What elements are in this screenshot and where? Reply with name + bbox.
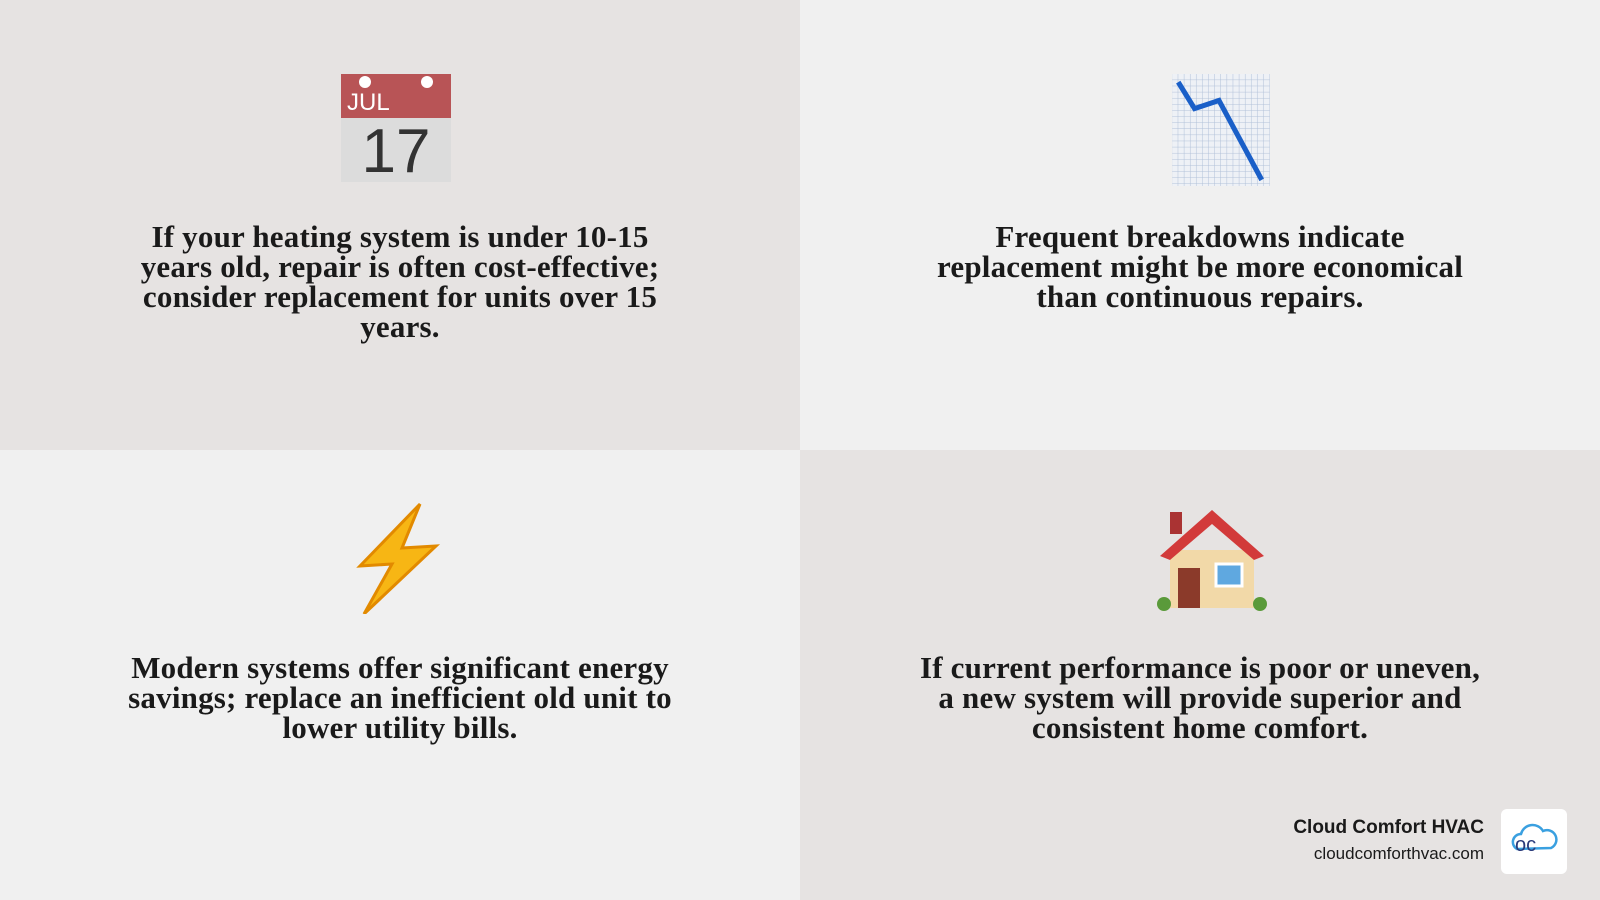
text: comfort advice: If current performance is poor or uneven,: [920, 650, 1480, 685]
text: energy advice: savings; replace an inefficient old unit to: [128, 680, 672, 715]
icon: calendar: [341, 74, 451, 184]
text: age advice: [141, 219, 659, 344]
text: comfort advice: [920, 650, 1480, 745]
icon: house: [1157, 510, 1267, 611]
text: energy advice: Modern systems offer significant energy: [131, 650, 669, 685]
text: energy advice: lower utility bills.: [282, 710, 518, 745]
text: breakdowns advice: Frequent breakdowns indicate: [995, 219, 1405, 254]
brand name: Cloud Comfort HVAC: [1293, 817, 1484, 838]
brand url: cloudcomforthvac.com: [1314, 844, 1484, 863]
text: breakdowns advice: [937, 219, 1463, 314]
panel: comfort: [800, 450, 1600, 900]
text: age advice: years old, repair is often cost-effective;: [141, 249, 659, 284]
text: age advice: consider replacement for units over 15: [143, 279, 657, 314]
icon: calendar: 17: [362, 117, 430, 184]
text: energy advice: [128, 650, 672, 745]
logo: [1501, 809, 1567, 874]
panel: breakdowns: [800, 0, 1600, 450]
icon: lightning: [356, 503, 440, 614]
brand block: [1293, 809, 1567, 874]
text: breakdowns advice: than continuous repairs.: [1036, 279, 1364, 314]
text: breakdowns advice: replacement might be more economical: [937, 249, 1463, 284]
text: comfort advice: a new system will provide superior and: [938, 680, 1462, 715]
text: comfort advice: consistent home comfort.: [1032, 710, 1368, 745]
text: age advice: years.: [360, 309, 440, 344]
text: age advice: If your heating system is under 10-15: [151, 219, 649, 254]
icon: calendar: JUL: [347, 89, 390, 116]
icon: declining chart: [1172, 74, 1270, 186]
panel: energy: [0, 450, 800, 900]
logo: oc: [1515, 834, 1536, 856]
panel: age: [0, 0, 800, 450]
